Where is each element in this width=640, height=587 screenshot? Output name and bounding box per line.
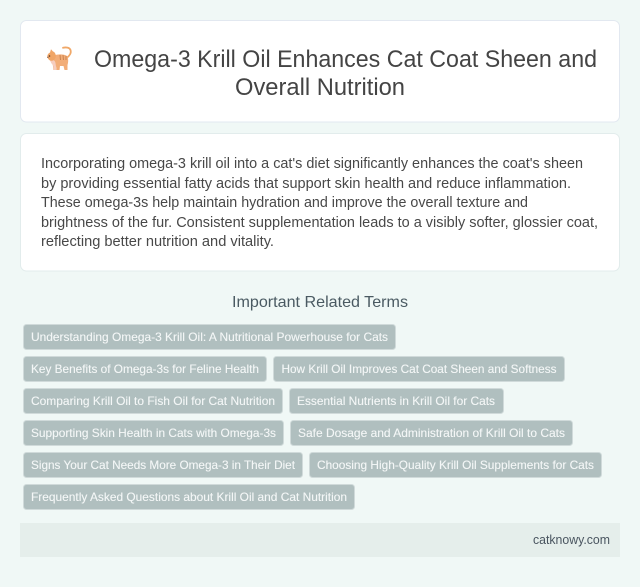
tag: Signs Your Cat Needs More Omega-3 in Their Diet bbox=[31, 458, 296, 472]
tag bbox=[24, 420, 284, 446]
tag: Choosing High-Quality Krill Oil Supplements for Cats bbox=[317, 458, 594, 472]
icon: cat bbox=[47, 47, 71, 70]
tag bbox=[310, 452, 602, 478]
description text bbox=[41, 156, 598, 250]
title text: Overall Nutrition bbox=[235, 74, 405, 101]
description text: reflecting better nutrition and vitality. bbox=[41, 234, 274, 250]
tag: Safe Dosage and Administration of Krill Oil to Cats bbox=[298, 426, 565, 440]
tag bbox=[274, 356, 564, 382]
title text: Omega-3 Krill Oil Enhances Cat Coat Sheen and bbox=[94, 46, 597, 73]
tag bbox=[24, 484, 354, 510]
title text bbox=[94, 46, 597, 101]
panel: description bbox=[20, 134, 620, 271]
tag list bbox=[24, 324, 602, 510]
footer text: catknowy.com bbox=[533, 533, 610, 547]
description text: brightness of the fur. Consistent supplementation leads to a visibly softer, glossier coat, bbox=[41, 215, 598, 231]
description text: by providing essential fatty acids that support skin health and reduce inflammation. bbox=[41, 176, 571, 192]
tag: How Krill Oil Improves Cat Coat Sheen and Softness bbox=[282, 362, 556, 376]
tag bbox=[24, 324, 396, 350]
tag: Frequently Asked Questions about Krill Oil and Cat Nutrition bbox=[31, 490, 347, 504]
tag bbox=[290, 420, 572, 446]
tag: Supporting Skin Health in Cats with Omega-3s bbox=[31, 426, 276, 440]
heading: important related terms: Important Related Terms bbox=[232, 294, 408, 311]
tag: Key Benefits of Omega-3s for Feline Health bbox=[31, 362, 259, 376]
panel: title header bbox=[20, 20, 620, 122]
tag bbox=[290, 388, 504, 414]
tag bbox=[24, 388, 282, 414]
tag bbox=[24, 452, 302, 478]
tag: Comparing Krill Oil to Fish Oil for Cat Nutrition bbox=[31, 394, 275, 408]
tag: Understanding Omega-3 Krill Oil: A Nutritional Powerhouse for Cats bbox=[31, 330, 388, 344]
description text: These omega-3s help maintain hydration and improve the overall texture and bbox=[41, 195, 528, 211]
description text: Incorporating omega-3 krill oil into a cat's diet significantly enhances the coat's sheen bbox=[41, 156, 583, 172]
tag bbox=[24, 356, 266, 382]
tag: Essential Nutrients in Krill Oil for Cats bbox=[297, 394, 495, 408]
footer bbox=[20, 523, 620, 557]
